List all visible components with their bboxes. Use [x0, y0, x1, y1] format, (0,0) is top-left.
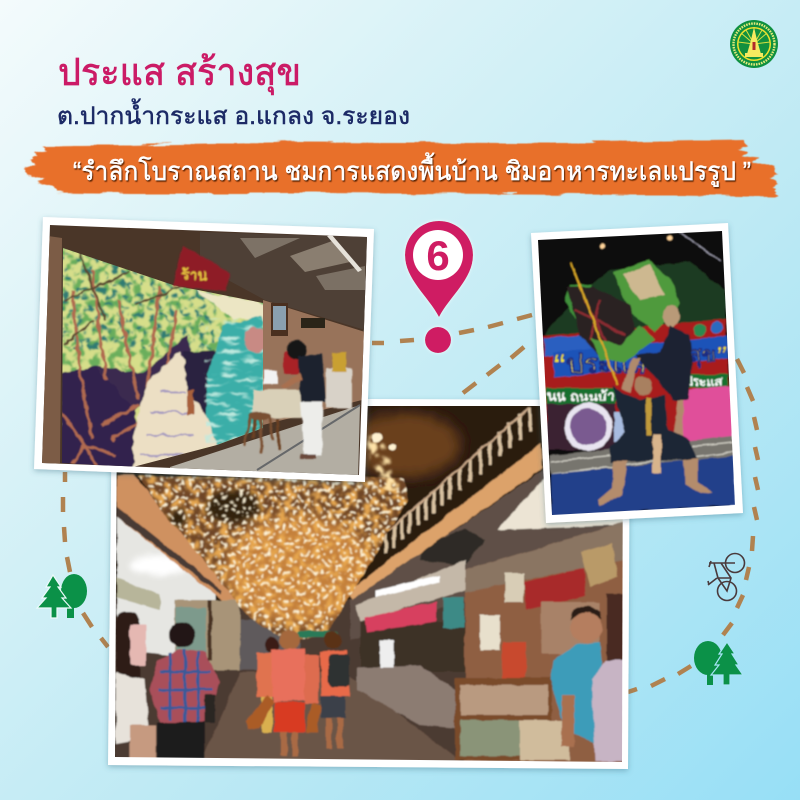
photo: shadow puppet performers on stage: สุข”	[688, 342, 727, 369]
stage banner	[542, 318, 730, 433]
person at right edge	[606, 593, 624, 663]
puppet	[565, 285, 592, 320]
dark mangrove roots	[60, 366, 136, 470]
title: ประแส สร้างสุข	[58, 52, 301, 95]
banner: orange brush stroke with tagline	[23, 140, 778, 197]
dashed route	[63, 315, 758, 692]
mural painting	[62, 248, 263, 466]
subtitle: location: ต.ปากน้ำกระแส อ.แกลง จ.ระยอง	[57, 98, 410, 130]
water	[207, 316, 263, 445]
shop goods	[365, 602, 436, 632]
map pin number 6: 6	[426, 232, 450, 279]
sign	[173, 246, 230, 291]
soft details group: ร้าน	[181, 267, 208, 284]
icon: trees right	[694, 641, 743, 685]
upper performer	[662, 305, 680, 327]
photo: night market street with lights	[108, 398, 630, 770]
map pin number 6	[405, 221, 473, 353]
vendor carts	[357, 665, 455, 728]
wood shop wall	[463, 560, 622, 762]
boardwalk	[133, 352, 220, 470]
fence and stage	[549, 436, 734, 476]
left post	[42, 236, 62, 465]
photo: shadow puppet performers on stage: นน ถนนบ้าน	[547, 388, 624, 404]
banner text: “ประแส	[553, 349, 647, 379]
roof	[200, 232, 367, 330]
rocks by water	[183, 350, 220, 415]
photo: mangrove mural and man writing	[34, 217, 374, 482]
crowd	[116, 612, 140, 687]
soft details group	[173, 246, 352, 459]
photo: shadow puppet performers on stage: ประแส	[684, 374, 723, 389]
photo: shadow puppet performers on stage	[531, 223, 743, 523]
floor	[170, 405, 360, 480]
street lower dark area	[115, 599, 466, 760]
logo: green round emblem	[730, 20, 778, 68]
icon: bicycle	[708, 554, 744, 600]
banner: orange brush stroke with tagline: “รำลึกโบราณสถาน ชมการแสดงพื้นบ้าน ชิมอาหารทะเลแปรรูป ”	[73, 152, 751, 187]
man in blue shirt	[570, 611, 602, 643]
wood wall right	[263, 300, 365, 425]
lower performer	[634, 376, 652, 396]
man	[286, 340, 306, 360]
glass showcase	[455, 678, 552, 760]
shop cart and table	[326, 368, 352, 408]
road	[200, 672, 465, 765]
string lights mass	[130, 470, 415, 645]
icon: trees left	[37, 574, 87, 618]
underside of walkway right	[350, 469, 611, 640]
walkway beam and railing	[372, 448, 532, 572]
